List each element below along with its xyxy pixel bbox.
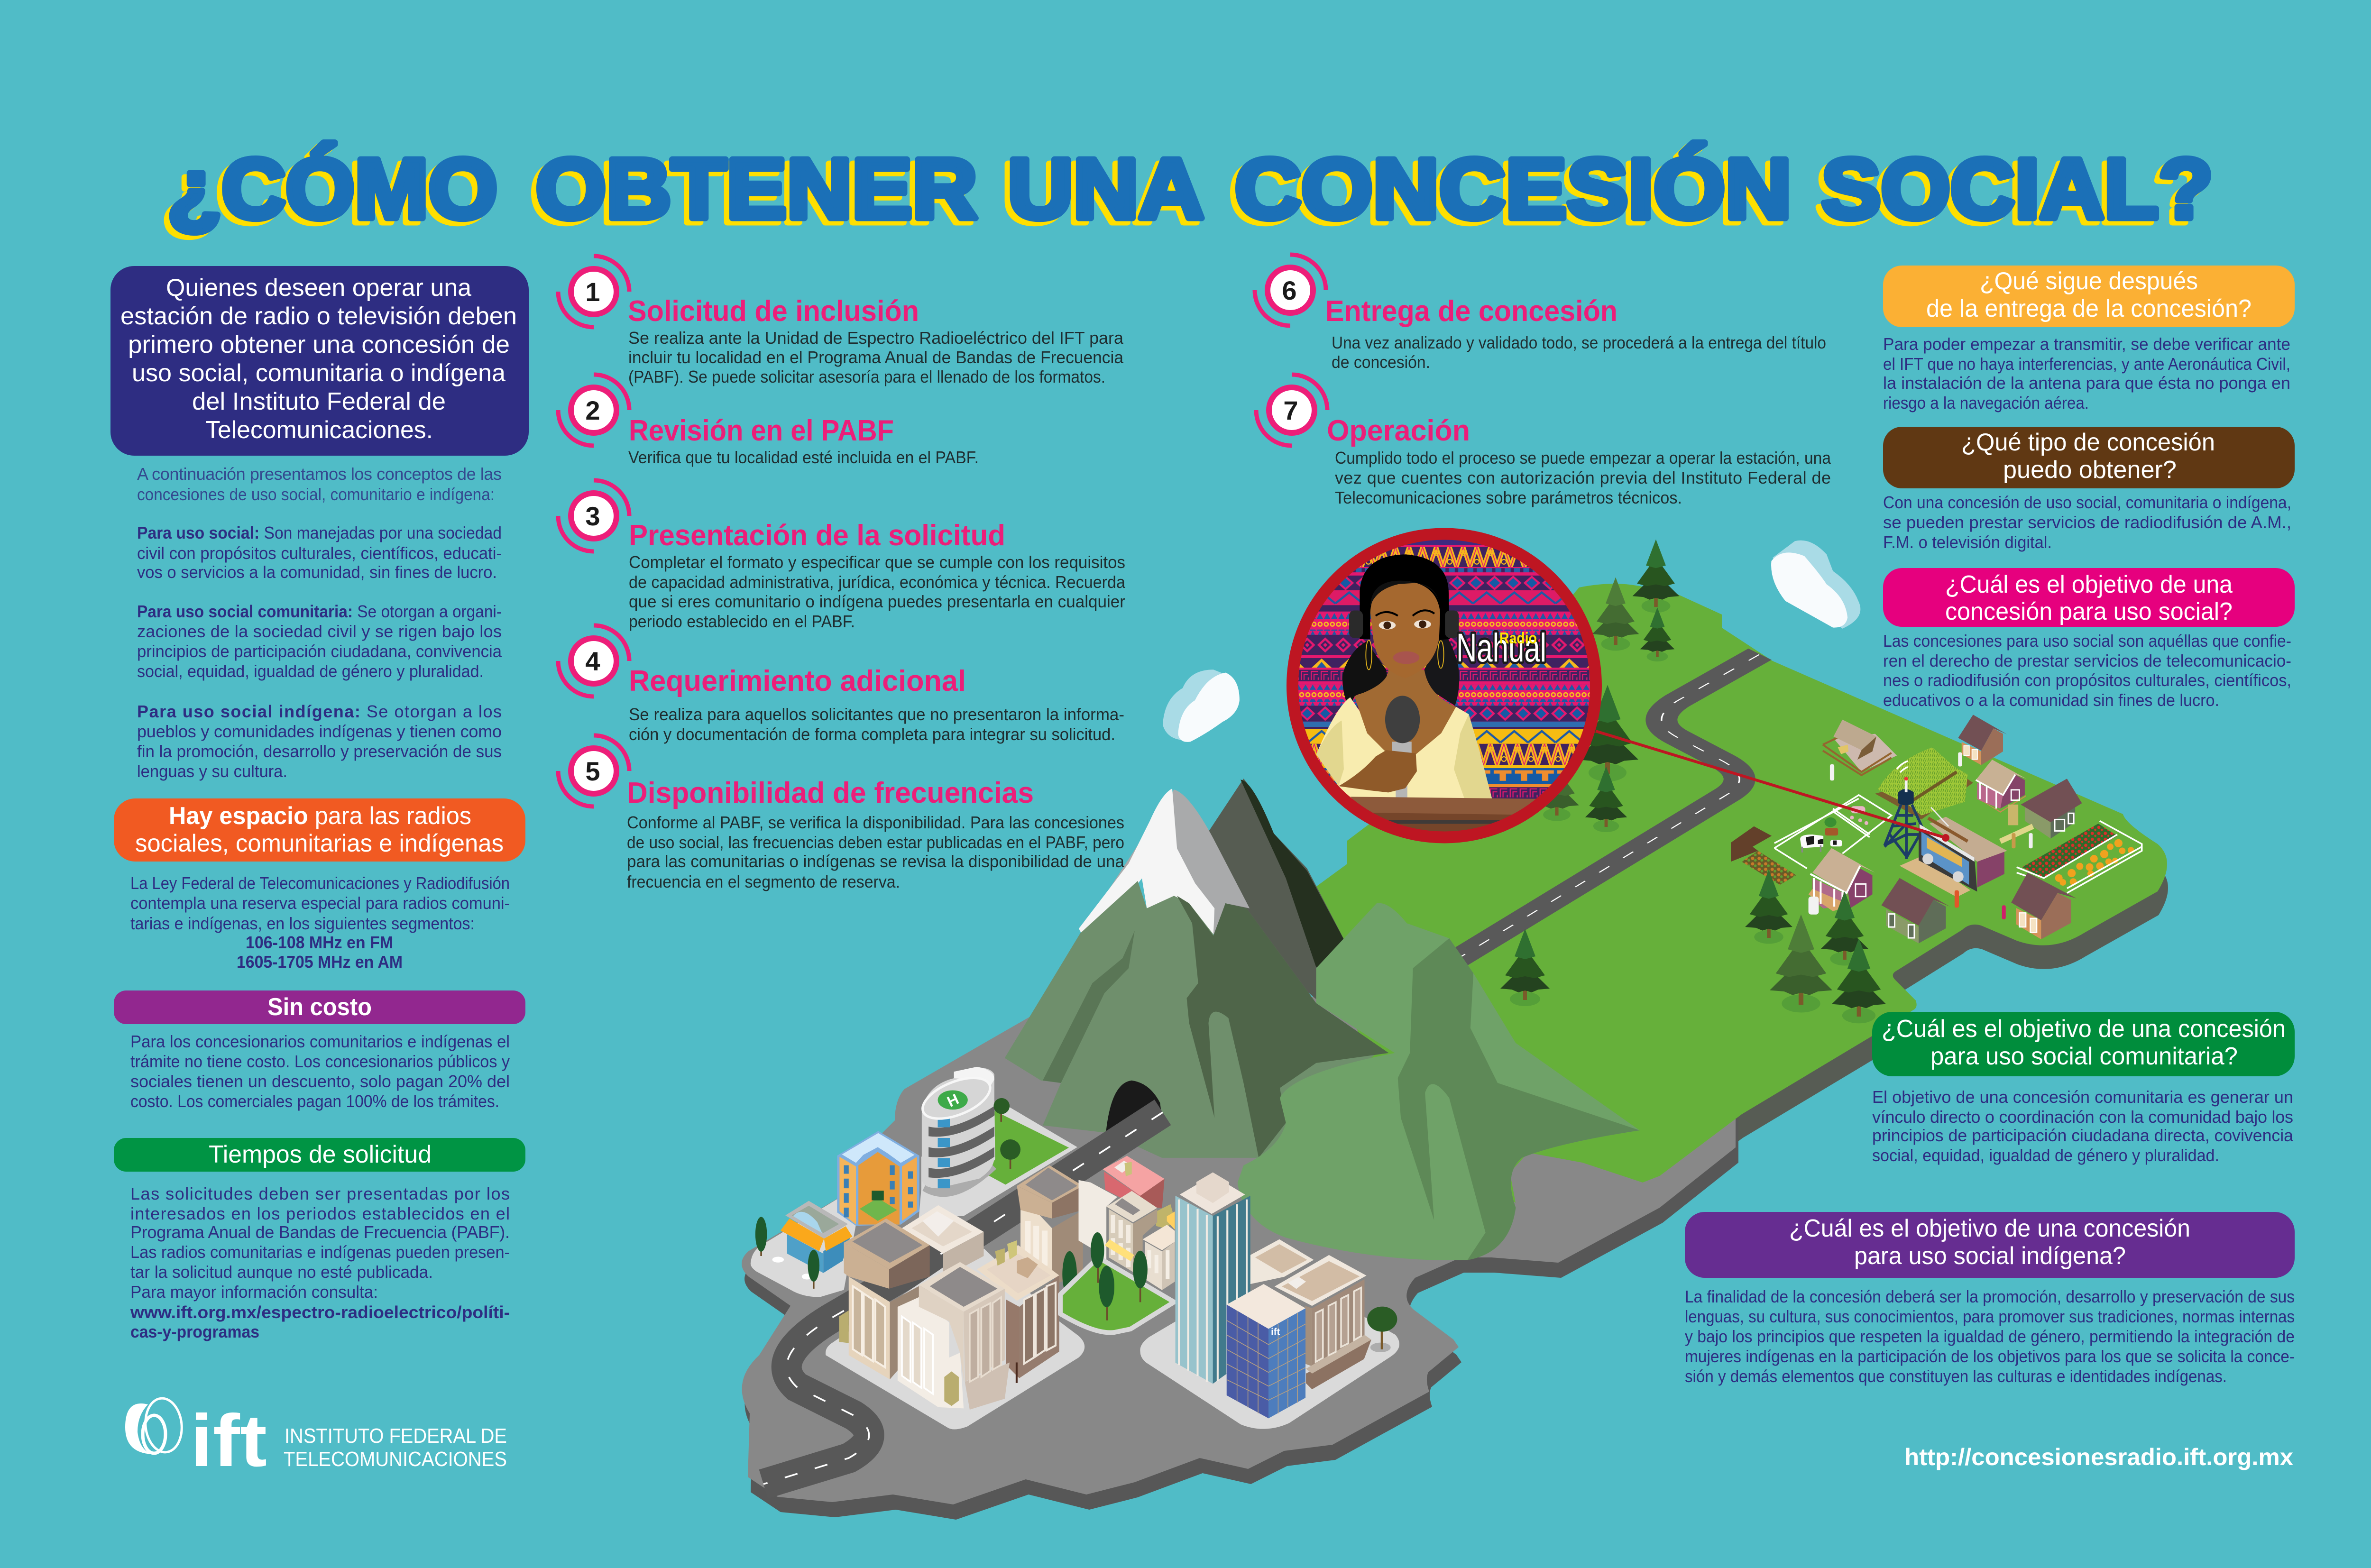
text block: tiempos: Las radios comunitarias e indígenas pueden presen- bbox=[130, 1242, 510, 1262]
green land top bbox=[1315, 584, 2167, 1203]
couple by porch bbox=[1809, 897, 1819, 915]
title: SOCIAL? bbox=[1821, 141, 2213, 237]
icon: step number 3: 3 bbox=[585, 501, 600, 531]
step 4: Se realiza para aquellos solicitantes que no presentaron la informa- bbox=[629, 705, 1124, 724]
icon: step number 5: 5 bbox=[585, 756, 600, 786]
station name: Nahual bbox=[1456, 625, 1546, 670]
medallion ring bbox=[1293, 534, 1596, 837]
icon: step number 2: 2 bbox=[585, 395, 600, 425]
panel: qué sigue bbox=[1883, 266, 2295, 327]
step 4 bbox=[558, 625, 1124, 744]
text block: reserva de espectro: 1605-1705 MHz en AM bbox=[237, 952, 403, 972]
step 1: Se realiza ante la Unidad de Espectro Radioeléctrico del IFT para bbox=[628, 328, 1124, 348]
big radio house bbox=[1900, 807, 2007, 897]
panel: hay espacio: Hay espacio para las radios bbox=[169, 802, 471, 830]
step 2 bbox=[558, 375, 979, 467]
text block: concepts bbox=[137, 464, 502, 781]
text block: concepts: lenguas y su cultura. bbox=[137, 761, 287, 781]
panel: objetivo uso social bbox=[1883, 568, 2295, 627]
house top right bbox=[1958, 715, 2007, 765]
text block: sin costo: Para los concesionarios comunitarios e indígenas el bbox=[130, 1032, 510, 1051]
title: OBTENER bbox=[536, 141, 977, 237]
city left bbox=[751, 1067, 1084, 1429]
text block: tiempos: www.ift.org.mx/espectro-radioelectrico/políti- bbox=[130, 1302, 510, 1322]
step 5: Conforme al PABF, se verifica la disponibilidad. Para las concesiones bbox=[627, 813, 1124, 832]
text block: objetivo uso social: educativos o a la comunidad sin fines de lucro. bbox=[1883, 690, 2219, 710]
logo: ift bbox=[125, 1396, 507, 1482]
blue glass building: ift bbox=[1271, 1327, 1280, 1337]
text block: reserva de espectro: contempla una reserva especial para radios comuni- bbox=[130, 893, 510, 913]
panel: qué sigue: ¿Qué sigue después bbox=[1980, 267, 2198, 295]
panel: tipo de concesión: puedo obtener? bbox=[2003, 456, 2177, 484]
panel: intro: Quienes deseen operar una bbox=[166, 274, 471, 302]
panel: intro: primero obtener una concesión de bbox=[128, 331, 510, 358]
text block: sin costo bbox=[130, 1032, 510, 1111]
panel: intro: estación de radio o televisión deben bbox=[120, 303, 517, 330]
icon: step number 1 bbox=[558, 256, 629, 327]
ethnic pattern background bbox=[1298, 540, 1590, 832]
panel: objetivo uso social: concesión para uso social? bbox=[1945, 598, 2233, 625]
lawn near helipad bbox=[985, 1111, 1069, 1184]
city land side bbox=[744, 1011, 1738, 1520]
title: ¿CÓMO bbox=[167, 141, 497, 237]
text block: tiempos: Programa Anual de Bandas de Frecuencia (PABF). bbox=[130, 1222, 510, 1242]
text block: tipo de concesión: se pueden prestar servicios de radiodifusión de A.M., bbox=[1883, 513, 2291, 532]
step 7: vez que cuentes con autorización previa del Instituto Federal de bbox=[1335, 468, 1831, 487]
title: UNA bbox=[1002, 146, 1199, 241]
near brown building bbox=[1275, 1255, 1371, 1389]
text block: concepts: zaciones de la sociedad civil y se rigen bajo los bbox=[137, 622, 502, 641]
right block bbox=[977, 1240, 1059, 1378]
text block: concepts: concesiones de uso social, comunitario e indígena: bbox=[137, 485, 495, 504]
text block: reserva de espectro: 106-108 MHz en FM bbox=[246, 933, 393, 952]
back dark mountain bbox=[1207, 779, 1351, 999]
house with porch bbox=[1809, 848, 1875, 911]
pavilion bbox=[1823, 720, 1897, 775]
step 1: (PABF). Se puede solicitar asesoría para el llenado de los formatos. bbox=[628, 367, 1105, 386]
panel: hay espacio: sociales, comunitarias e indígenas bbox=[135, 830, 504, 857]
logo: ift: ift bbox=[190, 1400, 267, 1482]
city road bbox=[763, 1112, 1163, 1484]
garden plot bbox=[1731, 826, 1796, 885]
illustration: land with roads bbox=[742, 584, 2168, 1520]
text block: objetivo comunitaria: principios de participación ciudadana directa, covivencia bbox=[1872, 1126, 2294, 1145]
website url: http://concesionesradio.ift.org.mx bbox=[1904, 1444, 2293, 1470]
gray-green house bbox=[2021, 779, 2082, 839]
step 5: frecuencia en el segmento de reserva. bbox=[627, 872, 900, 891]
text block: tiempos: interesados en los periodos establecidos en el bbox=[130, 1204, 510, 1223]
text block: sin costo: sociales tienen un descuento, solo pagan 20% del bbox=[130, 1072, 510, 1091]
house bottom right bbox=[2011, 872, 2077, 939]
step 6: de concesión. bbox=[1332, 352, 1430, 372]
helipad tower: H bbox=[945, 1090, 961, 1110]
step 2: Revisión en el PABF bbox=[629, 414, 894, 447]
announcer bbox=[1316, 554, 1536, 833]
step 3: Completar el formato y especificar que se cumple con los requisitos bbox=[629, 552, 1125, 572]
radio tower bbox=[1884, 761, 1925, 859]
text block: concepts: fin la promoción, desarrollo y preservación de sus bbox=[137, 742, 502, 761]
ethnic pattern background: Radio bbox=[1499, 629, 1537, 647]
icon: step number 6 bbox=[1255, 255, 1326, 326]
title: CONCESIÓN bbox=[1235, 141, 1792, 237]
text block: objetivo indígena: y bajo los principios que respeten la igualdad de género, permitiendo la integración de bbox=[1685, 1327, 2295, 1346]
blue and orange apartments bbox=[837, 1131, 919, 1226]
icon: step number 4 bbox=[558, 625, 629, 697]
panel: intro: uso social, comunitaria o indígena bbox=[132, 359, 505, 387]
green land side bbox=[1316, 607, 2168, 1209]
text block: qué sigue bbox=[1883, 334, 2290, 413]
panel: sin costo: Sin costo bbox=[267, 993, 372, 1021]
icon: step number 1: 1 bbox=[585, 277, 600, 307]
person near pavilion bbox=[1830, 764, 1834, 780]
text block: objetivo uso social: ren el derecho de prestar servicios de telecomunicacio- bbox=[1883, 651, 2291, 670]
cloud: right bbox=[1771, 541, 1860, 629]
people bbox=[1955, 890, 2006, 919]
pads bbox=[751, 1107, 1084, 1429]
panel: objetivo uso social: ¿Cuál es el objetivo de una bbox=[1945, 571, 2233, 598]
text block: tiempos: Las solicitudes deben ser presentadas por los bbox=[130, 1184, 510, 1203]
cloud: left bbox=[1163, 669, 1240, 742]
city land top bbox=[742, 996, 1736, 1504]
text block: qué sigue: la instalación de la antena para que ésta no ponga en bbox=[1883, 373, 2290, 393]
text block: reserva de espectro bbox=[130, 873, 510, 972]
step 5: Disponibilidad de frecuencias bbox=[627, 777, 1034, 809]
village bbox=[1731, 715, 2142, 944]
helipad tower bbox=[917, 1067, 996, 1197]
park trees bbox=[1091, 1232, 1148, 1320]
text block: objetivo uso social bbox=[1883, 631, 2291, 710]
icon: step number 5 bbox=[558, 735, 629, 807]
blue glass building bbox=[1227, 1284, 1305, 1418]
small cream building bbox=[1143, 1225, 1175, 1290]
step 7: Cumplido todo el proceso se puede empezar a operar la estación, una bbox=[1335, 448, 1831, 468]
front green mountain bbox=[1238, 903, 1640, 1260]
text block: reserva de espectro: La Ley Federal de Telecomunicaciones y Radiodifusión bbox=[130, 873, 510, 893]
city right bbox=[1078, 1156, 1399, 1429]
panel: objetivo indígena bbox=[1685, 1212, 2295, 1278]
glass skyscraper bbox=[1176, 1172, 1250, 1384]
icon: ift orbit bbox=[125, 1396, 184, 1454]
text block: tiempos bbox=[130, 1184, 510, 1341]
upper tan tower bbox=[1017, 1165, 1083, 1283]
panel: intro bbox=[110, 266, 529, 456]
step 5: para las comunitarias o indígenas se revisa la disponibilidad de una bbox=[627, 852, 1125, 871]
text block: concepts: social, equidad, igualdad de género y pluralidad. bbox=[137, 661, 484, 681]
text block: objetivo indígena: mujeres indígenas en la participación de los objetivos para los que se solicita la conce- bbox=[1685, 1347, 2295, 1366]
panel: sin costo bbox=[114, 990, 525, 1024]
red building bbox=[1103, 1156, 1165, 1208]
text block: concepts: Para uso social indígena: Se otorgan a los bbox=[137, 702, 502, 721]
panel: hay espacio bbox=[114, 798, 525, 862]
step 3: que si eres comunitario o indígena puedes presentarla en cualquier bbox=[629, 592, 1125, 611]
mountains bbox=[1005, 779, 1640, 1260]
panel: objetivo indígena: para uso social indígena? bbox=[1854, 1242, 2126, 1270]
trees in front of village bbox=[1745, 870, 1886, 1023]
step 5 bbox=[558, 735, 1125, 891]
panel: tipo de concesión: ¿Qué tipo de concesión bbox=[1961, 429, 2215, 456]
icon: step number 6: 6 bbox=[1282, 275, 1297, 305]
text block: objetivo indígena: lenguas, su cultura, sus conocimientos, para promover sus tradiciones, normas internas bbox=[1685, 1307, 2295, 1326]
logo: ift: INSTITUTO FEDERAL DE bbox=[285, 1424, 507, 1448]
icon: step number 4: 4 bbox=[585, 646, 600, 676]
text block: objetivo indígena bbox=[1685, 1287, 2295, 1386]
text block: tipo de concesión: F.M. o televisión digital. bbox=[1883, 532, 2052, 552]
panel: objetivo comunitaria: ¿Cuál es el objetivo de una concesión bbox=[1882, 1015, 2286, 1043]
text block: tiempos: cas-y-programas bbox=[130, 1322, 259, 1341]
snow peak bbox=[1080, 789, 1250, 936]
animal pen bbox=[1774, 795, 1892, 869]
step 3: periodo establecido en el PABF. bbox=[629, 612, 855, 631]
panel: objetivo comunitaria: para uso social comunitaria? bbox=[1930, 1043, 2238, 1070]
text block: concepts: Para uso social comunitaria: Se otorgan a organi- bbox=[137, 602, 502, 621]
step 7: Operación bbox=[1327, 414, 1470, 447]
beige block with solar bbox=[839, 1219, 930, 1379]
title bbox=[162, 141, 2213, 241]
step 3 bbox=[558, 480, 1126, 631]
icon: step number 7: 7 bbox=[1283, 395, 1298, 425]
radio signal line bbox=[1596, 731, 1949, 842]
title: OBTENER bbox=[531, 146, 972, 241]
text block: sin costo: trámite no tiene costo. Los concesionarios públicos y bbox=[130, 1052, 510, 1071]
step 7 bbox=[1256, 375, 1831, 507]
workers and plank bbox=[2000, 805, 2033, 848]
left green mountain bbox=[1005, 881, 1377, 1158]
white block bbox=[1078, 1180, 1117, 1260]
text block: concepts: A continuación presentamos los conceptos de las bbox=[137, 464, 502, 484]
step 4: Requerimiento adicional bbox=[629, 665, 966, 697]
step 1 bbox=[558, 256, 1124, 386]
text block: concepts: vos o servicios a la comunidad, sin fines de lucro. bbox=[137, 562, 497, 582]
title: SOCIAL? bbox=[1816, 146, 2208, 241]
house bottom center bbox=[1881, 878, 1950, 944]
vegetable garden bbox=[2017, 821, 2142, 893]
olive boxes bbox=[1156, 1204, 1175, 1229]
panel: qué sigue: de la entrega de la concesión? bbox=[1926, 295, 2252, 322]
radio announcer medallion bbox=[1280, 534, 1612, 837]
step 1: incluir tu localidad en el Programa Anual de Bandas de Frecuencia bbox=[628, 348, 1124, 367]
title: CONCESIÓN bbox=[1230, 146, 1786, 241]
panel: tiempos de solicitud: Tiempos de solicitud bbox=[209, 1141, 432, 1168]
person by house bbox=[1958, 752, 1962, 766]
pink house bbox=[1975, 760, 2026, 813]
text block: objetivo indígena: sión y demás elementos que constituyen las culturas e identidades indígenas. bbox=[1685, 1366, 2227, 1386]
text block: tipo de concesión: Con una concesión de uso social, comunitaria o indígena, bbox=[1883, 493, 2291, 512]
icon: step number 3 bbox=[558, 480, 629, 551]
text block: concepts: civil con propósitos culturales, científicos, educati- bbox=[137, 543, 502, 563]
text block: qué sigue: Para poder empezar a transmitir, se debe verificar ante bbox=[1883, 334, 2290, 354]
text block: tiempos: tar la solicitud aunque no esté publicada. bbox=[130, 1262, 433, 1282]
tan small building bbox=[1105, 1191, 1157, 1272]
step 3: Presentación de la solicitud bbox=[629, 519, 1005, 552]
step 3: de capacidad administrativa, jurídica, económica y técnica. Recuerda bbox=[629, 572, 1126, 592]
text block: objetivo comunitaria: El objetivo de una concesión comunitaria es generar un bbox=[1872, 1087, 2293, 1107]
title: UNA bbox=[1008, 141, 1204, 237]
text block: tiempos: Para mayor información consulta: bbox=[130, 1282, 378, 1302]
panel: objetivo indígena: ¿Cuál es el objetivo de una concesión bbox=[1789, 1215, 2190, 1242]
round tree bbox=[1367, 1307, 1397, 1352]
text block: objetivo comunitaria: social, equidad, igualdad de género y pluralidad. bbox=[1872, 1146, 2219, 1165]
pad bbox=[1140, 1303, 1399, 1429]
far brown building bbox=[1250, 1239, 1314, 1284]
small trees bbox=[755, 1098, 1077, 1302]
step 4: ción y documentación de forma completa para integrar su solicitud. bbox=[629, 724, 1115, 744]
park lawn bbox=[1060, 1257, 1174, 1333]
panel: intro: del Instituto Federal de bbox=[192, 388, 446, 415]
panel: intro: Telecomunicaciones. bbox=[205, 416, 433, 444]
ice cream cafe bbox=[772, 1201, 852, 1279]
road on green land bbox=[1455, 654, 1760, 960]
text block: objetivo uso social: nes o radiodifusión con propósitos culturales, científicos, bbox=[1883, 670, 2291, 690]
panel: tiempos de solicitud bbox=[114, 1138, 525, 1172]
text block: concepts: Para uso social: Son manejadas por una sociedad bbox=[137, 523, 502, 542]
text block: tipo de concesión bbox=[1883, 493, 2291, 552]
logo: ift: TELECOMUNICACIONES bbox=[284, 1448, 507, 1471]
behind beige block bbox=[902, 1205, 983, 1278]
trees on green land bbox=[1500, 540, 1679, 1006]
text block: qué sigue: el IFT que no haya interferencias, y ante Aeronáutica Civil, bbox=[1883, 354, 2290, 374]
panel: tipo de concesión bbox=[1883, 427, 2295, 488]
step 2: Verifica que tu localidad esté incluida en el PABF. bbox=[628, 448, 979, 467]
panel: objetivo comunitaria bbox=[1872, 1012, 2295, 1076]
step 6: Entrega de concesión bbox=[1325, 295, 1617, 328]
step 6: Una vez analizado y validado todo, se procederá a la entrega del título bbox=[1332, 333, 1826, 352]
icon: step number 2 bbox=[558, 375, 629, 446]
crop field bbox=[1875, 747, 1973, 819]
step 5: de uso social, las frecuencias deben estar publicadas en el PABF, pero bbox=[627, 833, 1124, 852]
text block: objetivo indígena: La finalidad de la concesión deberá ser la promoción, desarrollo y preservación de sus bbox=[1685, 1287, 2295, 1306]
step 6 bbox=[1255, 255, 1826, 372]
step 7: Telecomunicaciones sobre parámetros técnicos. bbox=[1335, 488, 1682, 507]
title: ¿CÓMO bbox=[162, 146, 492, 241]
text block: sin costo: costo. Los comerciales pagan 100% de los trámites. bbox=[130, 1091, 499, 1111]
text block: concepts: principios de participación ciudadana, convivencia bbox=[137, 642, 502, 661]
text block: objetivo comunitaria bbox=[1872, 1087, 2294, 1165]
text block: objetivo comunitaria: vínculo directo o coordinación con la comunidad bajo los bbox=[1872, 1107, 2293, 1127]
text block: objetivo uso social: Las concesiones para uso social son aquéllas que confie- bbox=[1883, 631, 2291, 651]
text block: qué sigue: riesgo a la navegación aérea. bbox=[1883, 393, 2089, 413]
text block: concepts: pueblos y comunidades indígenas y tienen como bbox=[137, 722, 502, 741]
front light tower bbox=[898, 1262, 1018, 1410]
icon: step number 7 bbox=[1256, 375, 1327, 446]
tunnel bbox=[1106, 1081, 1162, 1135]
step 1: Solicitud de inclusión bbox=[628, 295, 919, 328]
text block: reserva de espectro: tarias e indígenas, en los siguientes segmentos: bbox=[130, 914, 475, 933]
